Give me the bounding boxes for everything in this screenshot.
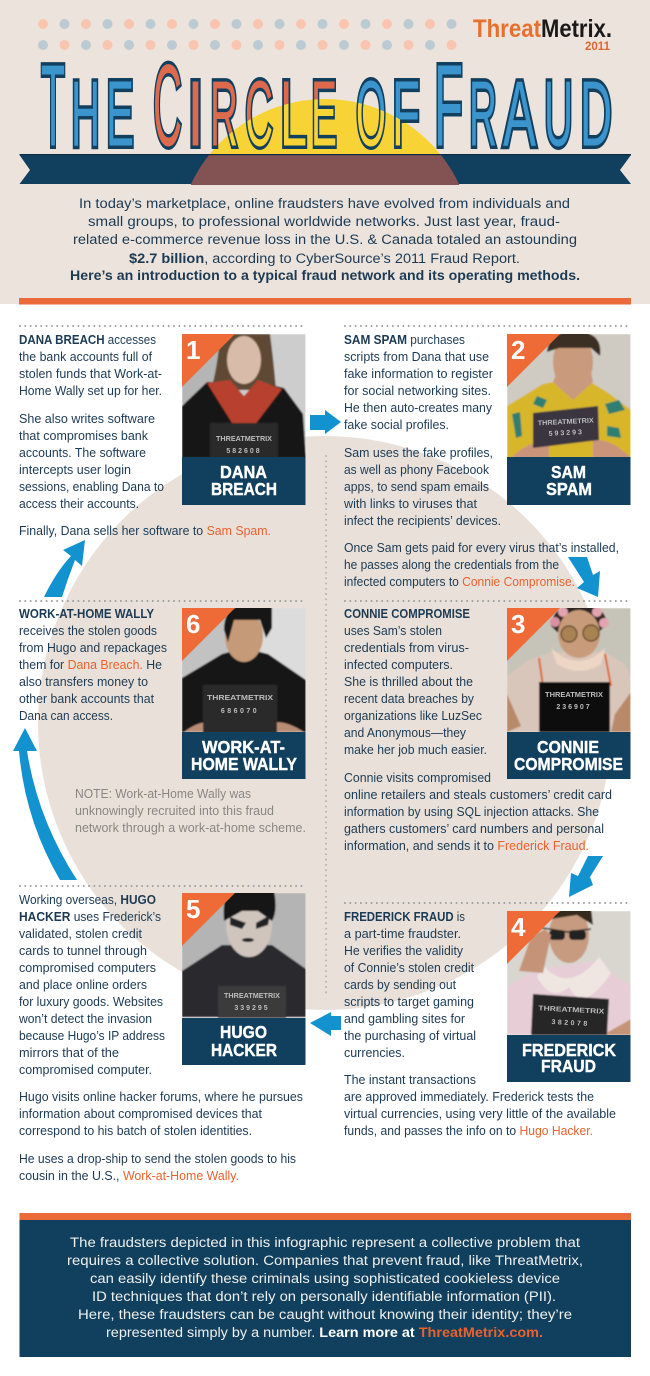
- note: Wally recruited: unknowingly recruited into this fraud: [75, 804, 274, 818]
- orange divider bar: [19, 298, 631, 304]
- panel: Dana Breach text: sessions, enabling Dana to: [19, 480, 164, 494]
- name label: Work-at-Home Wally: [182, 732, 306, 779]
- panel: Sam Spam text: infected computers to Connie Compromise.: [344, 575, 575, 589]
- panel: Frederick Fraud text: cards by sending out: [344, 978, 457, 992]
- panel: Sam Spam text: for social networking sites.: [344, 384, 491, 398]
- panel: Frederick Fraud text: are approved immediately. Frederick tests the: [344, 1090, 594, 1104]
- number badge 4: 4: [511, 912, 526, 942]
- panel: Work-at-Home Wally text: them for Dana Breach. He: [19, 658, 162, 672]
- card 6: Work-at-Home Wally photo: 686070: [221, 708, 259, 715]
- panel: Sam Spam text: he passes along the credentials from the: [344, 558, 559, 572]
- number badge 3: 3: [511, 609, 525, 639]
- panel: Dana Breach text: access their accounts.: [19, 497, 139, 511]
- panel: Connie Compromise text: information, and sends it to Frederick Fraud.: [344, 839, 589, 853]
- panel: Hugo Hacker text: Hugo visits online hacker forums, where he pursues: [19, 1090, 303, 1104]
- title: T: [41, 40, 65, 170]
- name label: Sam Spam: SAM: [551, 462, 586, 482]
- card 6: Work-at-Home Wally photo: [182, 606, 306, 733]
- panel: Dana Breach text: Home Wally set up for her.: [19, 384, 162, 398]
- panel: Hugo Hacker text: compromised computers: [19, 961, 156, 975]
- panel: Connie Compromise text: She is thrilled about the: [344, 675, 473, 689]
- card 5: Hugo Hacker photo: THREATMETRIX: [224, 993, 280, 1000]
- panel: Connie Compromise text: CONNIE COMPROMISE: [344, 607, 470, 621]
- panel: footer call to action: can easily identify these criminals using sophisticated cookieless device: [90, 1271, 560, 1286]
- panel: Frederick Fraud text: currencies.: [344, 1046, 405, 1060]
- panel: Frederick Fraud text: a part-time fraudster.: [344, 927, 461, 941]
- text: D: [580, 62, 612, 166]
- title: C: [245, 62, 273, 166]
- panel: Dana Breach text: the bank accounts full of: [19, 350, 153, 364]
- panel: Work-at-Home Wally text: Dana can access.: [19, 709, 113, 723]
- arrow: 6 to 1: [44, 540, 85, 597]
- panel: Hugo Hacker text: for luxury goods. Websites: [19, 995, 163, 1009]
- note: Wally recruited: [75, 787, 306, 835]
- title: [41, 40, 612, 170]
- panel: Connie Compromise text: recent data breaches by: [344, 692, 475, 706]
- panel: Sam Spam text: He then auto-creates many: [344, 401, 493, 415]
- panel: footer call to action: [20, 1213, 631, 1357]
- panel: Dana Breach text: stolen funds that Work-at-: [19, 367, 162, 381]
- panel: footer call to action: represented simply by a number. Learn more at ThreatMetrix.com.: [106, 1325, 543, 1340]
- panel: Dana Breach text: that compromises bank: [19, 429, 149, 443]
- panel: Hugo Hacker text: mirrors that of the: [19, 1046, 119, 1060]
- note: Wally recruited: network through a work-at-home scheme.: [75, 821, 306, 835]
- panel: Work-at-Home Wally text: WORK-AT-HOME WALLY: [19, 607, 155, 621]
- title: A: [503, 62, 536, 166]
- card 2: Sam Spam photo: [507, 332, 631, 458]
- arrow: 1 to 2: [310, 410, 341, 434]
- arrow: 3 to 4: [569, 856, 603, 897]
- panel: Frederick Fraud text: of Connie’s stolen credit: [344, 961, 475, 975]
- number badge 5: 5: [186, 894, 200, 924]
- name label: Frederick Fraud: FREDERICK: [522, 1040, 616, 1060]
- panel: Sam Spam text: Once Sam gets paid for every virus that’s installed,: [344, 541, 619, 555]
- dotted dividers: [20, 326, 631, 995]
- panel: Connie Compromise text: uses Sam’s stolen: [344, 624, 442, 638]
- name label: Work-at-Home Wally: HOME WALLY: [191, 754, 297, 774]
- panel: header background: [0, 0, 650, 304]
- name label: Dana Breach: BREACH: [211, 479, 277, 499]
- panel: Connie Compromise text: credentials from virus-: [344, 641, 469, 655]
- panel: Frederick Fraud text: the purchasing of virtual: [344, 1029, 476, 1043]
- title: E: [106, 62, 134, 166]
- panel: Connie Compromise text: organizations like LuzSec: [344, 709, 482, 723]
- card 3: Connie Compromise photo: 236907: [556, 704, 592, 711]
- panel: Sam Spam text: with links to viruses that: [343, 497, 478, 511]
- name label: Connie Compromise: [507, 732, 630, 779]
- panel: Sam Spam text: infect the recipients’ devices.: [344, 514, 501, 528]
- intro text: related e-commerce revenue loss in the U.S. & Canada totaled an astounding: [73, 232, 577, 247]
- panel: Connie Compromise text: [344, 607, 612, 853]
- note: Wally recruited: NOTE: Work-at-Home Wally was: [75, 787, 251, 801]
- title: L: [280, 62, 307, 166]
- panel: Dana Breach text: [19, 333, 271, 538]
- panel: Sam Spam text: scripts from Dana that use: [344, 350, 489, 364]
- name label: Hugo Hacker: HACKER: [211, 1040, 277, 1060]
- panel: Frederick Fraud text: The instant transactions: [344, 1073, 476, 1087]
- title: O: [356, 62, 386, 166]
- panel: Sam Spam text: as well as phony Facebook: [344, 463, 490, 477]
- name label: Frederick Fraud: FRAUD: [541, 1056, 596, 1076]
- arrow: 5 to 6: [13, 728, 77, 880]
- title: U: [544, 62, 573, 166]
- panel: Hugo Hacker text: validated, stolen credit: [19, 927, 143, 941]
- panel: Sam Spam text: fake social profiles.: [344, 418, 449, 432]
- panel: Sam Spam text: apps, to send spam emails: [344, 480, 489, 494]
- panel: footer call to action: ID techniques that don’t rely on personally identifiable information (PII).: [92, 1289, 556, 1304]
- card 3: Connie Compromise photo: THREATMETRIX: [545, 692, 603, 699]
- panel: Work-at-Home Wally text: from Hugo and repackages: [19, 641, 167, 655]
- background circle: [38, 436, 612, 1010]
- name label: Work-at-Home Wally: WORK-AT-: [202, 737, 285, 757]
- intro text: Here’s an introduction to a typical fraud network and its operating methods.: [70, 268, 580, 283]
- panel: Hugo Hacker text: cards to tunnel through: [19, 944, 147, 958]
- panel: Hugo Hacker text: information about compromised devices that: [19, 1107, 263, 1121]
- panel: Frederick Fraud text: He verifies the validity: [344, 944, 464, 958]
- name label: Hugo Hacker: [182, 1018, 306, 1065]
- panel: Hugo Hacker text: He uses a drop-ship to send the stolen goods to his: [19, 1152, 296, 1166]
- panel: Hugo Hacker text: compromised computer.: [19, 1063, 152, 1077]
- title: R: [469, 62, 497, 166]
- intro text: [70, 196, 580, 283]
- number badge 2: 2: [511, 335, 525, 365]
- name label: Frederick Fraud: [507, 1035, 630, 1082]
- banner ribbon: [20, 154, 631, 185]
- card 3: Connie Compromise photo: [507, 604, 631, 732]
- panel: Hugo Hacker text: correspond to his batch of stolen identities.: [19, 1124, 252, 1138]
- panel: Frederick Fraud text: virtual currencies, using very little of the available: [344, 1107, 616, 1121]
- panel: Work-at-Home Wally text: [19, 607, 167, 723]
- panel: Sam Spam text: SAM SPAM purchases: [344, 333, 465, 347]
- card 6: Work-at-Home Wally photo: THREATMETRIX: [207, 695, 273, 702]
- panel: footer call to action: The fraudsters depicted in this infographic represent a collective problem that: [70, 1235, 580, 1250]
- panel: Frederick Fraud text: scripts to target gaming: [344, 995, 474, 1009]
- panel: Dana Breach text: She also writes software: [19, 412, 155, 426]
- name label: Sam Spam: SPAM: [546, 479, 592, 499]
- logo: ThreatMetrix 2011: [473, 15, 612, 53]
- title: C: [153, 40, 182, 170]
- panel: Frederick Fraud text: and gambling sites for: [344, 1012, 465, 1026]
- number badge 6: 6: [186, 609, 200, 639]
- name label: Sam Spam: [507, 457, 630, 505]
- panel: Hugo Hacker text: and place online orders: [19, 978, 147, 992]
- intro text: $2.7 billion , according to CyberSource’s 2011 Fraud Report.: [129, 251, 520, 266]
- panel: Frederick Fraud text: [344, 910, 616, 1138]
- name label: Dana Breach: DANA: [220, 462, 267, 482]
- card 1: Dana Breach photo: [182, 334, 306, 459]
- sun: [210, 99, 440, 154]
- panel: Connie Compromise text: online retailers and steals customers’ credit card: [344, 788, 612, 802]
- name label: Dana Breach: [182, 457, 306, 505]
- panel: Dana Breach text: accounts. The software: [19, 446, 146, 460]
- title: R: [210, 62, 238, 166]
- panel: Connie Compromise text: gathers customers’ card numbers and personal: [344, 822, 604, 836]
- panel: Connie Compromise text: Connie visits compromised: [344, 771, 491, 785]
- panel: Hugo Hacker text: cousin in the U.S., Work-at-Home Wally.: [19, 1169, 239, 1183]
- panel: footer call to action: Here, these fraudsters can be caught without knowing their identity; they’re: [78, 1307, 572, 1322]
- arrow: 2 to 3: [568, 557, 600, 597]
- panel: Work-at-Home Wally text: other bank accounts that: [19, 692, 155, 706]
- panel: Frederick Fraud text: funds, and passes the info on to Hugo Hacker.: [344, 1124, 593, 1138]
- card 2: Sam Spam photo: THREATMETRIX: [538, 417, 594, 427]
- title: F: [434, 40, 463, 170]
- name label: Connie Compromise: CONNIE: [537, 737, 599, 757]
- panel: Sam Spam text: fake information to register: [344, 367, 493, 381]
- title: I: [187, 62, 204, 166]
- name label: Connie Compromise: COMPROMISE: [514, 754, 623, 774]
- card 5: Hugo Hacker photo: 339295: [234, 1005, 270, 1012]
- arrow: 4 to 5: [310, 1012, 341, 1036]
- panel: Hugo Hacker text: because Hugo’s IP address: [19, 1029, 165, 1043]
- panel: Dana Breach text: intercepts user login: [19, 463, 131, 477]
- panel: Dana Breach text: Finally, Dana sells her software to Sam Spam.: [19, 524, 271, 538]
- panel: Work-at-Home Wally text: also transfers money to: [19, 675, 148, 689]
- panel: Connie Compromise text: and Anonymous—they: [344, 726, 467, 740]
- card 2: Sam Spam photo: 593293: [549, 429, 584, 438]
- panel: Work-at-Home Wally text: receives the stolen goods: [19, 624, 157, 638]
- panel: Hugo Hacker text: HACKER uses Frederick’s: [19, 910, 161, 924]
- card 5: Hugo Hacker photo: [182, 891, 306, 1018]
- panel: Connie Compromise text: information by using SQL injection attacks. She: [344, 805, 599, 819]
- title: F: [392, 62, 420, 166]
- intro text: In today’s marketplace, online fraudsters have evolved from individuals and: [79, 196, 570, 211]
- card 4: Frederick Fraud photo: [507, 907, 631, 1035]
- panel: Sam Spam text: Sam uses the fake profiles,: [344, 446, 493, 460]
- panel: Hugo Hacker text: won’t detect the invasion: [18, 1012, 152, 1026]
- panel: footer call to action: requires a collective solution. Companies that prevent fraud, like ThreatMetrix,: [67, 1253, 583, 1268]
- panel: Frederick Fraud text: FREDERICK FRAUD is: [344, 910, 465, 924]
- number badge 1: 1: [186, 335, 200, 365]
- title: H: [71, 62, 100, 166]
- panel: Dana Breach text: DANA BREACH accesses: [19, 333, 156, 347]
- card 4: Frederick Fraud photo: THREATMETRIX: [538, 1005, 605, 1016]
- name label: Hugo Hacker: HUGO: [220, 1022, 267, 1042]
- panel: Sam Spam text: [343, 333, 619, 589]
- panel: Hugo Hacker text: Working overseas, HUGO: [19, 893, 156, 907]
- logo: ThreatMetrix 2011: Threat: [473, 15, 542, 43]
- card 4: Frederick Fraud photo: 382078: [551, 1019, 590, 1028]
- dot pattern: [38, 19, 456, 50]
- card 1: Dana Breach photo: 582608: [226, 448, 262, 455]
- logo: ThreatMetrix 2011: Metrix.: [541, 15, 612, 43]
- intro text: small groups, to professional worldwide networks. Just last year, fraud-: [88, 214, 560, 229]
- card 1: Dana Breach photo: THREATMETRIX: [216, 436, 272, 443]
- logo: ThreatMetrix 2011: 2011: [585, 39, 610, 53]
- panel: Hugo Hacker text: [18, 893, 303, 1183]
- title: E: [311, 62, 337, 166]
- panel: Connie Compromise text: make her job much easier.: [344, 743, 487, 757]
- panel: Connie Compromise text: infected computers.: [344, 658, 453, 672]
